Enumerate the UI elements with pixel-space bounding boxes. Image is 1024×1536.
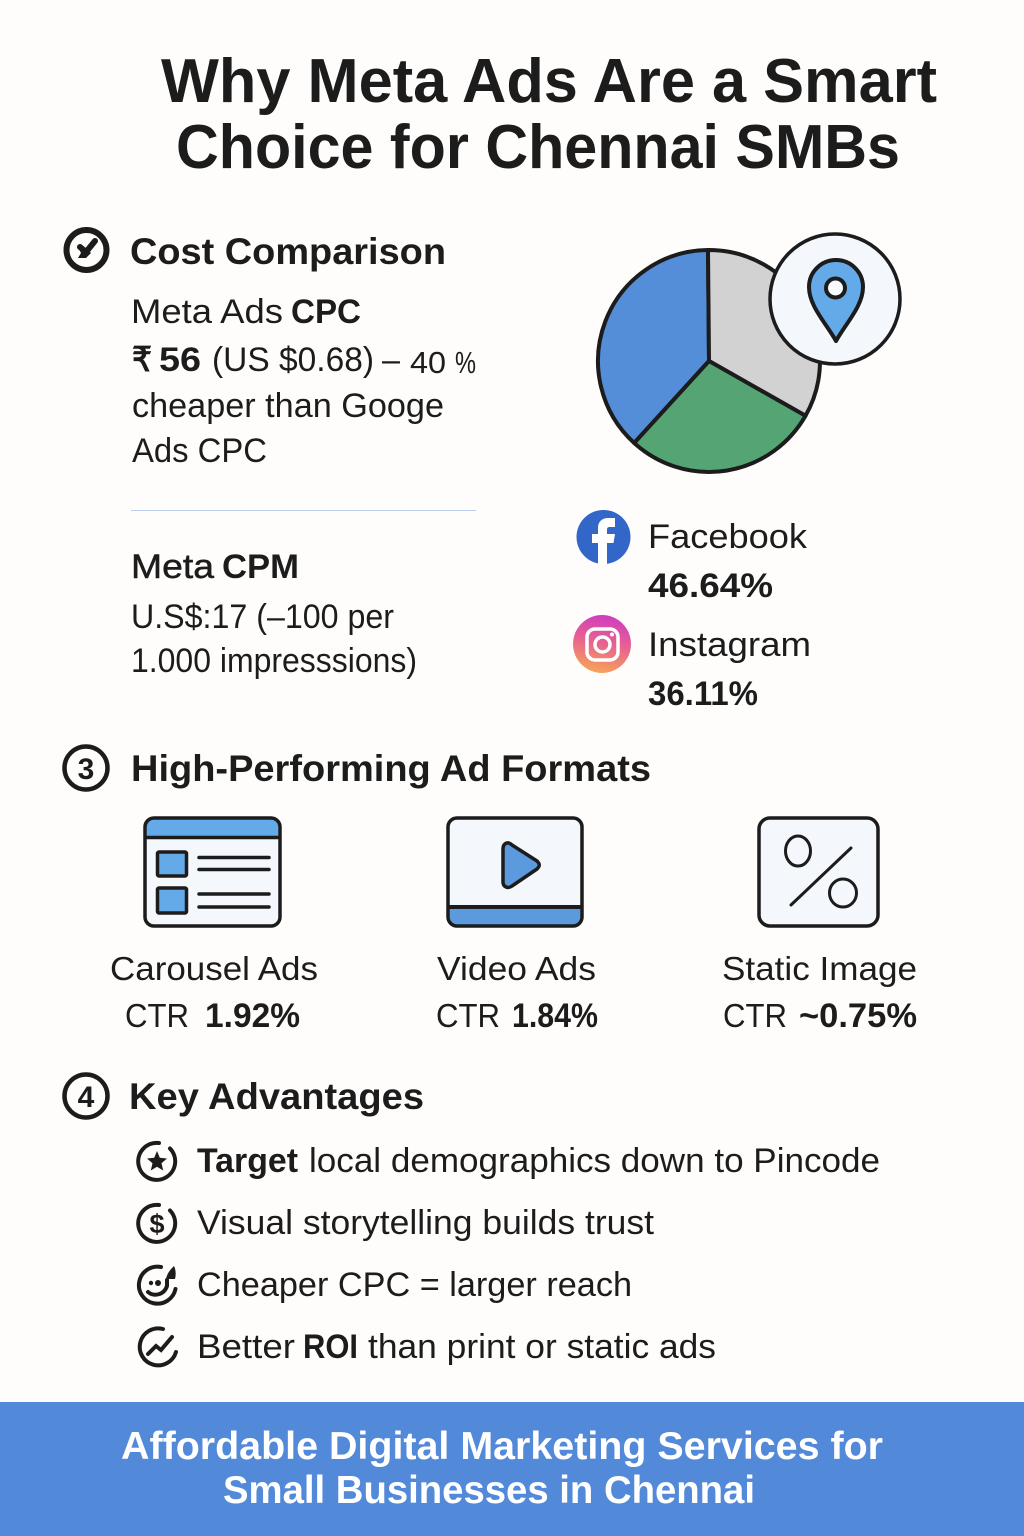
icon: trend check [140,1328,176,1365]
footer banner: Affordable Digital Marketing Services for [121,1425,883,1468]
title: Choice for Chennai SMBs [176,113,900,182]
text block: Meta Ads CPC: Meta Ads [131,293,283,331]
icon: number 3: 3 [78,753,94,786]
label: video ads: CTR [436,997,500,1034]
text block: Meta Ads CPC: Ads CPC [132,432,267,470]
label: video ads [436,950,598,1035]
icon: number 4 [64,1074,108,1118]
advantage: better ROI [197,1328,716,1366]
heading: key advantages: Key Advantages [129,1076,424,1117]
label: carousel ads: 1.92% [205,997,300,1035]
pie chart [598,250,820,472]
text block: Meta Ads CPC: % [455,345,476,380]
text block: Meta Ads CPC: ₹ [132,341,152,379]
text block: Meta CPM [131,548,417,680]
footer banner [0,1402,1024,1536]
text block: Meta Ads CPC: (US $0.68) [212,341,374,379]
panel: platform share [573,510,811,713]
advantage: target: Target [197,1142,298,1180]
label: Instagram share: Instagram [648,626,811,664]
text block: Meta Ads CPC: CPC [291,293,361,331]
icon: dollar: $ [149,1209,165,1239]
icon: video ads [448,818,582,926]
text block: Meta CPM: 1.000 impresssions) [131,642,417,680]
label: carousel ads: CTR [125,997,189,1034]
title [161,47,937,182]
label: Instagram share [648,626,811,713]
text block: Meta Ads CPC [131,293,476,470]
label: Facebook share: 46.64% [648,567,773,605]
icon: static image percent [759,818,878,926]
heading: cost comparison: Cost Comparison [130,231,446,272]
icon: Instagram [573,615,631,673]
label: carousel ads [110,950,318,1035]
text block: Meta CPM: Meta [131,548,214,586]
icon: number 4: 4 [78,1081,95,1114]
icon: dollar [138,1205,175,1242]
icon: number 3 [64,746,108,790]
label: static image: ~0.75% [799,997,917,1035]
label: carousel ads: Carousel Ads [110,950,318,987]
icon: Facebook [576,510,630,564]
icon: carousel ads [145,818,280,926]
panel: ad formats [64,746,917,1035]
text block: Meta CPM: CPM [222,548,299,586]
panel: key advantages [64,1074,880,1366]
advantage: better ROI: than print or static ads [368,1328,716,1366]
text block: Meta CPM: U.S$:17 (–100 per [131,598,394,636]
title: Why Meta Ads Are a Smart [161,47,937,116]
icon: location pin badge [770,234,900,364]
advantage: target: local demographics down to Pincode [309,1142,880,1180]
text block: Meta Ads CPC: – [382,341,400,379]
footer banner: Small Businesses in Chennai [223,1469,755,1512]
text block: Meta Ads CPC: 56 [159,341,201,379]
label: static image [722,950,917,1035]
label: video ads: 1.84% [512,997,598,1035]
panel: cost comparison [66,230,476,680]
label: Instagram share: 36.11% [648,675,758,713]
advantage: cheaper CPC: Cheaper CPC = larger reach [197,1266,632,1304]
advantage: better ROI: Better [197,1328,295,1366]
label: static image: CTR [723,997,787,1034]
label: static image: Static Image [722,950,917,987]
icon: cost comparison badge [66,230,106,270]
icon: smile with arrow [139,1266,176,1304]
text block: Meta Ads CPC: cheaper than Googe [132,387,444,425]
advantage: visual storytelling: Visual storytelling builds trust [197,1204,655,1242]
label: video ads: Video Ads [437,950,596,987]
text block: Meta Ads CPC: 40 [410,345,446,380]
label: Facebook share [648,518,808,605]
heading: ad formats: High-Performing Ad Formats [131,748,651,789]
advantage: better ROI: ROI [303,1328,358,1366]
label: Facebook share: Facebook [648,518,808,556]
icon: star [138,1143,175,1180]
